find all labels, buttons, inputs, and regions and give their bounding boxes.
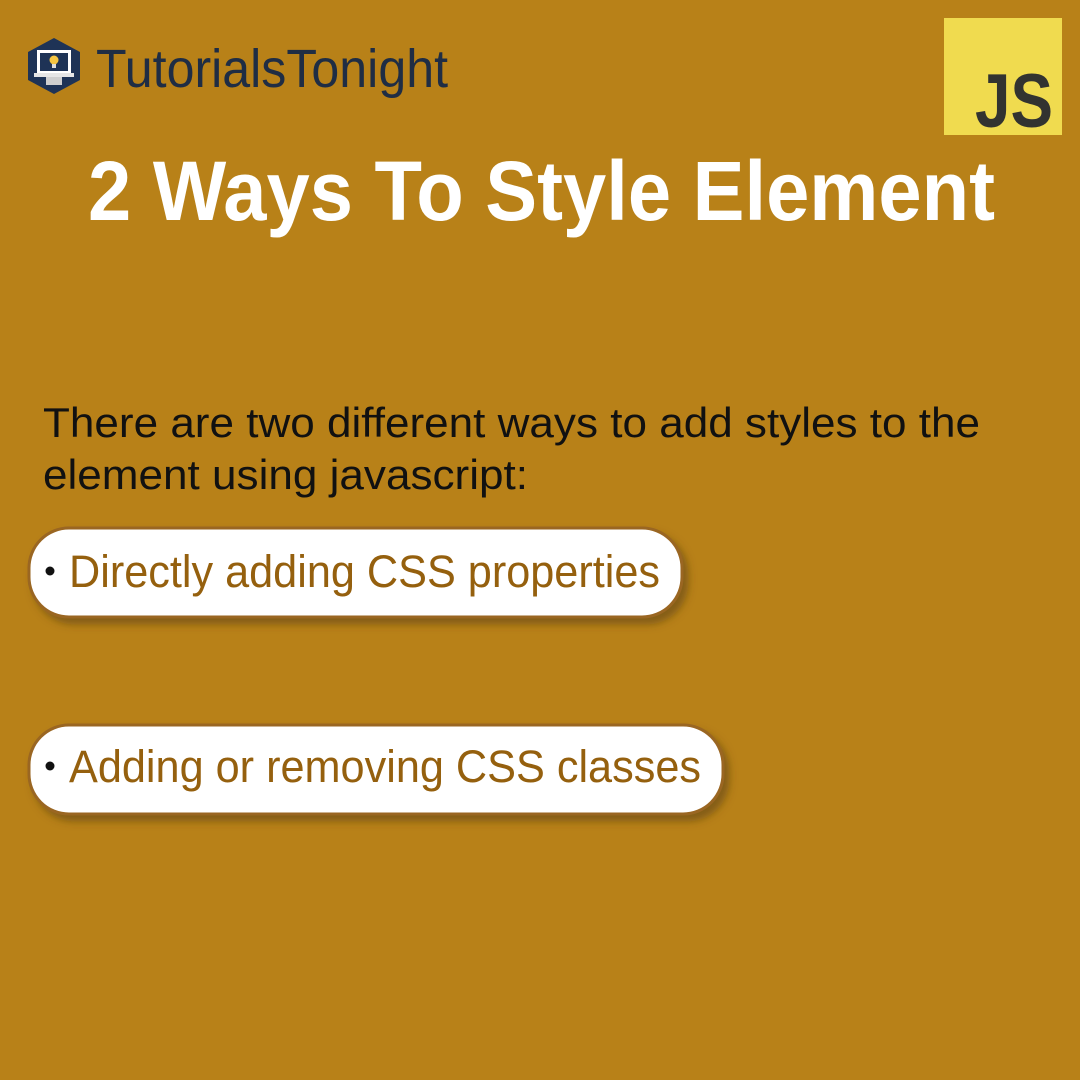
pill: directly adding CSS properties: Directly adding CSS properties xyxy=(69,546,660,597)
logo xyxy=(28,38,448,99)
intro text: There are two different ways to add styles to the xyxy=(43,399,980,446)
icon: JS badge: JS xyxy=(975,59,1053,144)
icon: JS badge xyxy=(944,18,1062,144)
icon: laptop hexagon xyxy=(28,38,80,94)
pill: adding or removing CSS classes: Adding or removing CSS classes xyxy=(69,741,701,792)
title: 2 Ways To Style Element xyxy=(88,144,995,238)
intro text: element using javascript: xyxy=(43,451,528,498)
logo text: TutorialsTonight xyxy=(96,39,448,99)
pill: adding or removing CSS classes xyxy=(29,725,723,814)
pill: directly adding CSS properties xyxy=(29,528,682,617)
intro text xyxy=(43,399,980,498)
